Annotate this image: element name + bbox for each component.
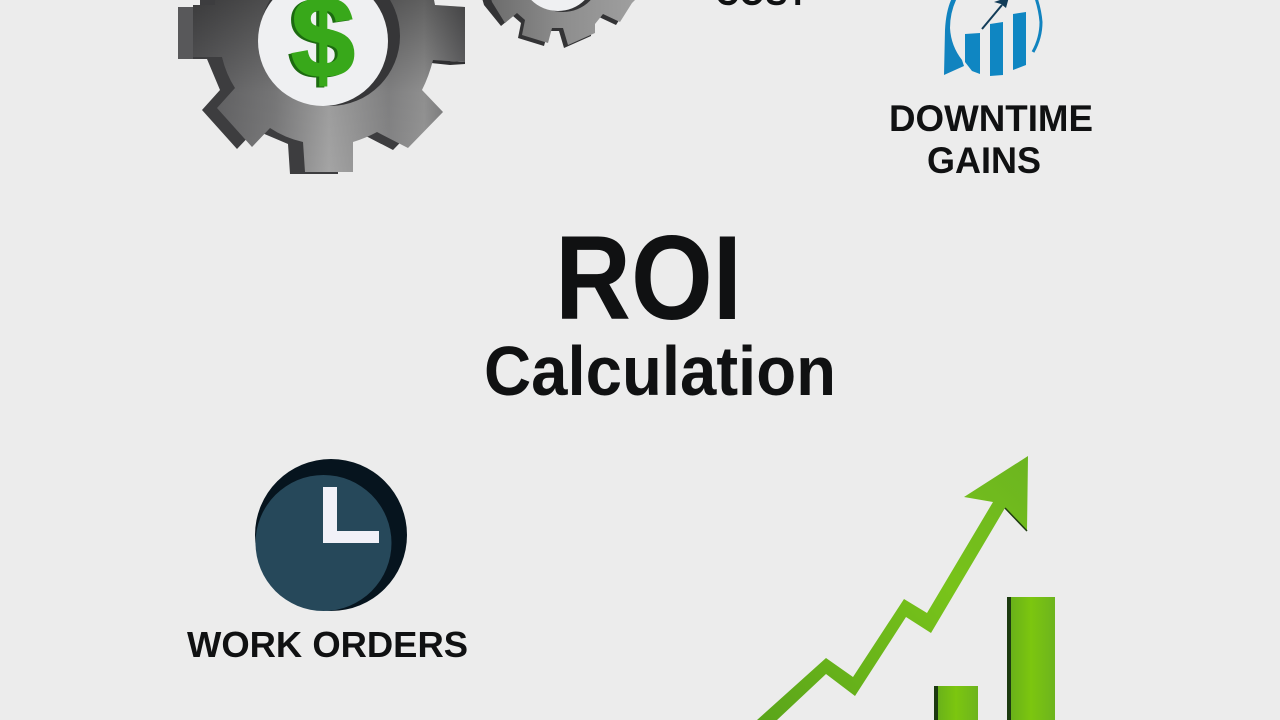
short bar	[934, 686, 978, 720]
clock hands	[323, 487, 379, 543]
gear front face	[193, 0, 465, 172]
gear hole inner wall	[260, 0, 400, 106]
icon: large gear with dollar sign	[178, 0, 465, 174]
gear hole opening	[258, 0, 388, 106]
gains line: GAINS	[927, 140, 1041, 181]
right ring arc	[1033, 0, 1041, 52]
label: work orders: WORK ORDERS	[187, 624, 468, 665]
bar three	[1013, 12, 1026, 70]
gear extruded side	[178, 0, 450, 174]
title: ROI: ROI	[555, 211, 742, 345]
left ring crescent	[944, 0, 964, 75]
chart: rising arrow with bars	[757, 456, 1055, 720]
icon: downtime gains bar chart	[944, 0, 1041, 76]
icon: small gear	[482, 0, 640, 48]
arrowhead shadow	[1005, 508, 1027, 531]
small gear extruded side	[482, 0, 636, 48]
bar one	[965, 33, 980, 74]
left tooth side	[178, 7, 193, 59]
trend arrow	[982, 0, 1009, 29]
gear right underside	[431, 60, 465, 65]
small gear hole wall	[525, 0, 601, 12]
bar two	[990, 22, 1003, 76]
clock dark rim	[255, 459, 407, 611]
small gear hole opening	[520, 0, 596, 11]
downtime line: DOWNTIME	[889, 98, 1093, 139]
label: downtime gains	[889, 98, 1093, 181]
icon: clock	[255, 459, 407, 611]
tall bar	[1007, 597, 1055, 720]
subtitle: calculation: Calculation	[484, 332, 836, 410]
gear top shading	[193, 0, 465, 172]
small gear front face	[490, 0, 640, 45]
clock face	[256, 475, 392, 611]
rising arrow	[757, 456, 1028, 720]
